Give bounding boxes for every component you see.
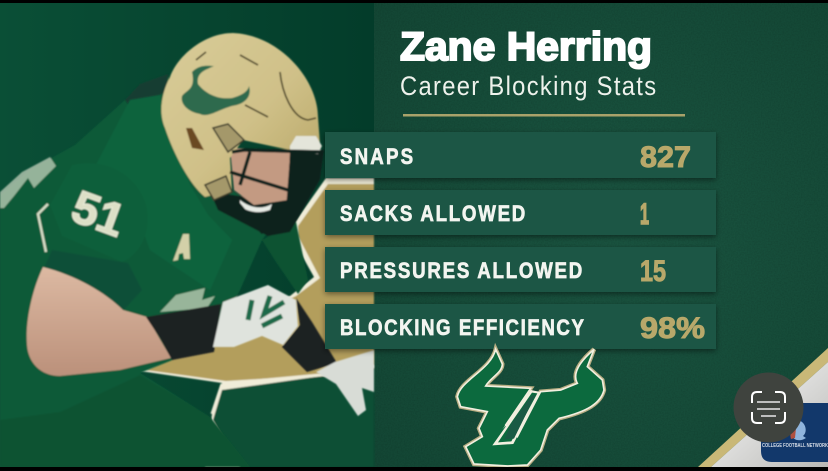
stat row: pressures allowed: 15 (640, 255, 666, 288)
stat row: pressures allowed (325, 247, 716, 292)
visor sticker (290, 136, 322, 154)
title: player name: Zane Herring (400, 25, 652, 69)
stat row: pressures allowed: PRESSURES ALLOWED (340, 260, 582, 283)
stat row: sacks allowed (325, 190, 716, 235)
sleeve cuff (44, 250, 142, 312)
second glove (316, 350, 374, 416)
helmet seam lines (196, 52, 316, 120)
gold divider rule (403, 114, 685, 116)
jersey number 51: 51 (65, 180, 132, 247)
back number fragment (0, 157, 56, 208)
stat row: sacks allowed: 1 (640, 198, 649, 231)
face (230, 148, 290, 205)
helmet clip plates (205, 124, 244, 200)
stat row: sacks allowed: SACKS ALLOWED (340, 203, 525, 226)
helmet bull logo (182, 66, 250, 115)
helmet side vent (186, 128, 204, 150)
shoulder trim (38, 204, 48, 252)
bottom black band (0, 467, 828, 471)
stat row: snaps (325, 132, 716, 178)
icon: screen scan button (734, 372, 804, 442)
right background panel (374, 3, 828, 467)
glove green stripes (248, 296, 284, 326)
helmet shell (161, 33, 320, 197)
stat row: blocking efficiency (325, 304, 716, 349)
far side shoulder pad (262, 222, 308, 294)
glove (213, 285, 298, 347)
stat row: blocking efficiency: 98% (640, 312, 705, 345)
icon: USF bulls logo (457, 349, 604, 466)
dark mask backing (210, 150, 324, 236)
white corner triangle (711, 362, 828, 467)
chest number fragment (160, 288, 215, 312)
watermark badge (761, 403, 828, 462)
gold corner stripe (698, 348, 828, 467)
facemask (230, 150, 322, 232)
player photo illustration (0, 33, 374, 467)
collar strip (125, 74, 168, 108)
top black band (0, 0, 828, 3)
subtitle: Career Blocking Stats (400, 72, 656, 101)
mouth guard (240, 200, 272, 212)
left background panel (0, 3, 374, 467)
wrist brace (146, 304, 221, 360)
sleeve (50, 163, 148, 262)
arm (27, 267, 171, 376)
jersey torso (0, 76, 275, 467)
pants shading (0, 375, 250, 467)
stat row: snaps: 827 (640, 141, 691, 174)
league A patch (173, 234, 190, 261)
second wrist brace (282, 298, 337, 372)
stat row: blocking efficiency: BLOCKING EFFICIENCY (340, 317, 584, 340)
gold star emblem behind player (140, 178, 374, 467)
chest and yoke (96, 95, 232, 290)
stat row: snaps: SNAPS (340, 146, 413, 169)
